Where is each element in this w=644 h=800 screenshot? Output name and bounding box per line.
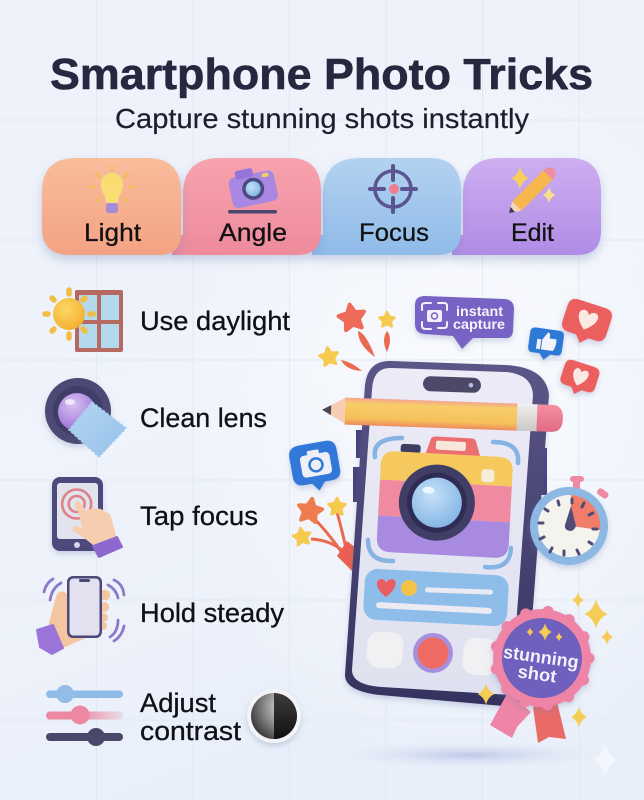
icon: sliders xyxy=(46,685,123,746)
icon: tablet with tapping hand xyxy=(52,477,122,557)
rosette xyxy=(493,609,591,707)
label: Adjust xyxy=(140,688,216,718)
smartphone xyxy=(345,361,549,707)
label: Hold steady xyxy=(140,598,284,628)
party popper: lower xyxy=(292,497,356,573)
party popper: upper xyxy=(318,302,395,371)
camera bubble xyxy=(288,439,343,495)
tip: hold steady xyxy=(37,576,284,654)
reaction: heart bubble large xyxy=(558,297,614,350)
speech bubble: instant capture: instant xyxy=(456,304,504,319)
icon: pencil with sparkles xyxy=(509,167,556,213)
sparkle on phone corner xyxy=(478,684,494,704)
card: Light xyxy=(42,158,181,255)
ground shadow xyxy=(335,742,605,768)
card: Focus xyxy=(312,158,461,255)
timer xyxy=(530,476,610,565)
pencil xyxy=(322,397,563,432)
app buttons xyxy=(366,631,499,676)
icon: scan camera xyxy=(422,303,447,329)
badge text: stunning xyxy=(502,642,580,672)
notch xyxy=(423,376,481,393)
side buttons xyxy=(353,430,547,502)
label: Tap focus xyxy=(140,501,258,531)
label: Light: Light xyxy=(84,219,141,247)
icon: tilted camera xyxy=(226,163,279,214)
icon: light bulb xyxy=(91,166,134,213)
category cards row xyxy=(42,158,601,255)
faint sparkle watermark xyxy=(592,744,618,776)
label: Angle: Angle xyxy=(219,219,287,247)
icon: hand holding phone xyxy=(37,576,124,654)
tip: adjust contrast xyxy=(46,685,301,746)
speech bubble: instant capture xyxy=(415,296,514,349)
card: Edit xyxy=(452,158,601,255)
icon: lens and cloth xyxy=(45,378,126,457)
hero illustration xyxy=(288,296,618,776)
subtitle: Capture stunning shots instantly xyxy=(115,103,529,134)
tip: use daylight xyxy=(45,290,290,352)
info card xyxy=(363,568,509,627)
focus brackets xyxy=(368,438,518,567)
award badge xyxy=(490,609,591,743)
sparkles xyxy=(571,592,613,727)
label: Use daylight xyxy=(140,306,290,336)
title: Smartphone Photo Tricks xyxy=(50,50,593,99)
icon: crosshair target xyxy=(370,166,416,212)
reaction: thumbs up bubble xyxy=(527,327,565,362)
label: contrast xyxy=(140,716,242,746)
icon: sun and window xyxy=(45,290,123,352)
reaction: heart bubble small xyxy=(557,358,601,400)
ribbons xyxy=(533,702,566,743)
label: Clean lens xyxy=(140,403,267,433)
icon: contrast dial xyxy=(247,689,301,743)
speech bubble: instant capture: capture xyxy=(453,317,506,332)
label: Focus: Focus xyxy=(359,219,429,247)
card: Angle xyxy=(172,158,321,255)
label: Edit: Edit xyxy=(511,219,554,247)
camera on screen xyxy=(376,434,514,558)
tip: tap focus xyxy=(52,477,258,557)
award badge: shot xyxy=(516,661,558,687)
tip: clean lens xyxy=(45,378,267,457)
screen xyxy=(352,368,533,695)
